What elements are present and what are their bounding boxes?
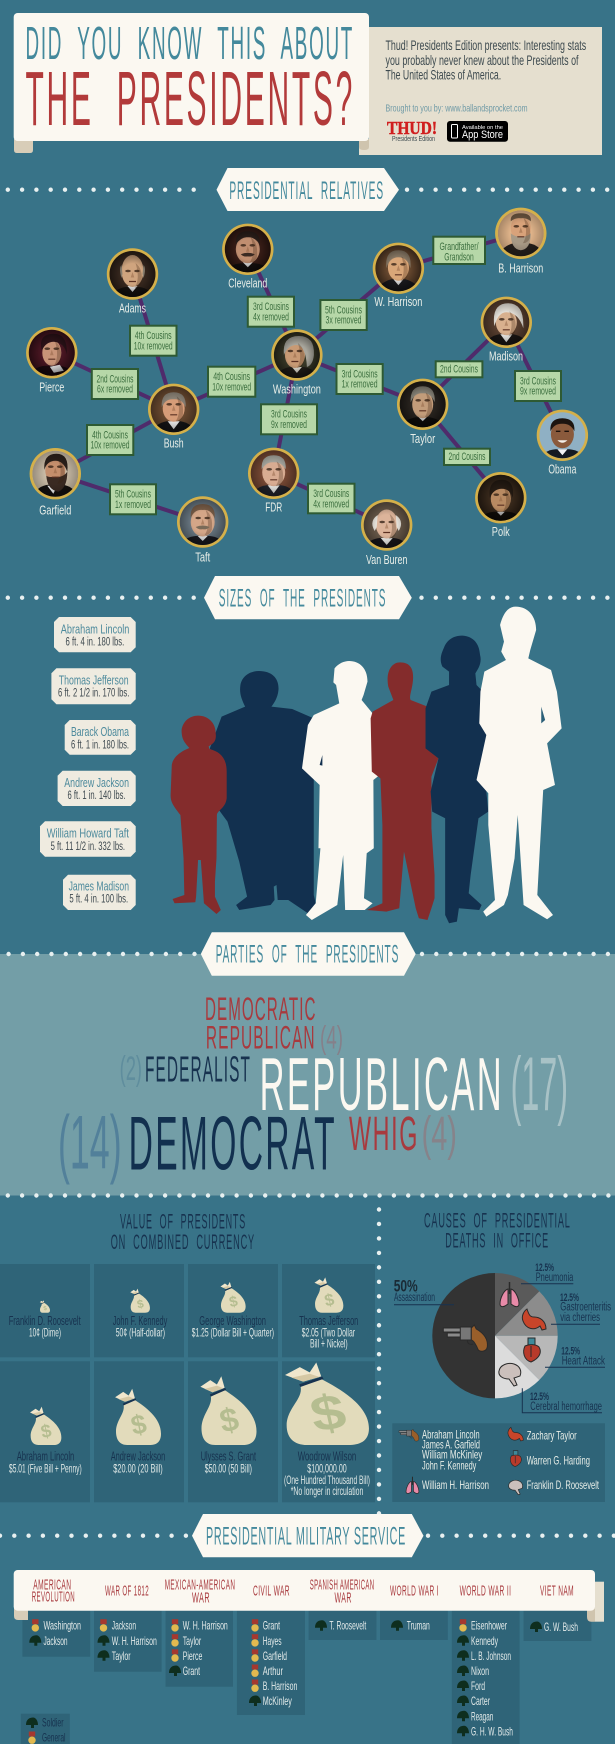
portrait: Madison	[481, 297, 532, 348]
tag: Lincoln: 6 ft. 4 in. 180 lbs.	[66, 637, 124, 649]
tag: Jefferson: 6 ft. 2 1/2 in. 170 lbs.	[58, 688, 129, 700]
tag: Madison: James Madison	[69, 879, 129, 894]
war banner: WAR OF 1812	[105, 1583, 149, 1600]
tag: Taft	[40, 821, 136, 857]
cell: Lincoln: $5.01 (Five Bill + Penny)	[9, 1461, 82, 1475]
cell: Jefferson: Bill + Nickel)	[310, 1336, 348, 1350]
relation labels: 6x removed	[97, 384, 133, 396]
relation labels: 9x removed	[520, 386, 556, 398]
column: Civil War: McKinley	[263, 1694, 292, 1708]
relation labels: 3rd Cousins	[520, 375, 556, 387]
heading ribbon: military	[192, 1514, 424, 1557]
cell: Jackson	[94, 1361, 184, 1502]
legend	[392, 1423, 605, 1502]
relation lines	[52, 233, 562, 525]
word: Democratic Republican: DEMOCRATIC	[205, 991, 316, 1027]
pie chart	[432, 1273, 558, 1398]
column: Mexican-American War: Taylor	[183, 1634, 201, 1648]
portrait: W. Harrison	[373, 243, 424, 294]
portrait: Pierce	[26, 327, 78, 378]
callout: gastroenteritis	[551, 1292, 611, 1324]
legend icon: heart	[510, 1451, 521, 1467]
column: World War II: Eisenhower	[471, 1619, 507, 1633]
relation labels: 4x removed	[253, 311, 289, 323]
portrait: B. Harrison	[495, 208, 546, 259]
portrait: FDR	[248, 448, 299, 499]
relation labels: 3rd Cousins	[271, 409, 307, 421]
legend icon: pistol	[399, 1429, 419, 1441]
panel: value on currency	[0, 1210, 375, 1502]
relation labels: 10x removed	[134, 340, 173, 352]
logo: Thud: Presidents Edition	[392, 134, 435, 143]
icon: pistol	[443, 1325, 487, 1351]
label: Adams	[119, 300, 146, 315]
cell: Grant: Ulysses S. Grant	[201, 1450, 256, 1464]
war banner	[14, 1570, 604, 1622]
war label: Spanish American War	[310, 1576, 374, 1606]
icon: heart	[524, 1338, 540, 1362]
legend text: assassinated: Abraham Lincoln	[422, 1427, 480, 1441]
tag: Taft: William Howard Taft	[47, 826, 129, 841]
cell: Roosevelt: $	[43, 1306, 48, 1312]
label: Taylor	[410, 431, 436, 446]
panel: header	[14, 13, 602, 155]
vertical divider	[377, 1210, 381, 1514]
title banner	[14, 13, 369, 153]
cell: Washington: $1.25 (Dollar Bill + Quarter)	[192, 1326, 274, 1340]
band	[0, 954, 615, 1196]
section: presidential relatives	[8, 168, 610, 567]
cell: Kennedy	[94, 1264, 184, 1357]
legend text: Taylor: Zachary Taylor	[527, 1428, 577, 1442]
column: Viet Nam: G. W. Bush	[544, 1620, 578, 1634]
section: military service	[0, 1514, 615, 1744]
cell: Wilson: $	[305, 1383, 351, 1442]
cell: Jefferson: Thomas Jefferson	[299, 1314, 358, 1328]
column: Civil War: Arthur	[263, 1664, 283, 1678]
tag: Madison: 5 ft. 4 in. 100 lbs.	[69, 894, 128, 906]
tag: Obama	[65, 720, 136, 755]
column: Mexican-American War	[166, 1608, 233, 1687]
section: parties of the presidents: DEMOCRAT	[129, 1101, 337, 1186]
legend text: Harrison: William H. Harrison	[422, 1478, 489, 1492]
panel: value on currency: VALUE OF PRESIDENTS	[120, 1210, 246, 1233]
label: Washington	[273, 381, 321, 396]
war label: Spanish American War: WAR	[334, 1589, 352, 1606]
tag: Jackson: Andrew Jackson	[64, 775, 129, 790]
tag: Jackson	[58, 771, 136, 806]
silhouette: Jackson	[367, 662, 438, 920]
badge: App Store: Available on the	[462, 125, 503, 131]
column: Civil War	[237, 1608, 305, 1715]
heading	[111, 1210, 255, 1254]
cell: Lincoln: $	[39, 1419, 53, 1442]
cell: Kennedy: $	[136, 1298, 145, 1311]
relation labels: 4th Cousins	[213, 371, 251, 383]
relation labels	[87, 237, 561, 514]
column: Mexican-American War: Grant	[183, 1664, 200, 1678]
section: parties of the presidents: FEDERALIST	[145, 1049, 251, 1090]
column: World War I: Truman	[407, 1619, 430, 1633]
relation labels: 1x removed	[342, 379, 378, 391]
relation labels: Grandson	[444, 252, 474, 264]
callout: assassination: 50%	[394, 1277, 418, 1296]
label: Van Buren	[366, 552, 407, 567]
tag: Obama: Barack Obama	[71, 724, 130, 739]
portrait: Bush	[148, 384, 199, 435]
section: sizes of the presidents	[8, 576, 610, 923]
word: Democratic Republican: (4)	[320, 1019, 343, 1055]
relation labels: Grandfather/	[440, 241, 479, 253]
heading ribbon: parties	[201, 932, 416, 976]
war banner: REVOLUTION	[32, 1589, 75, 1606]
war banner: WORLD WAR I	[390, 1583, 439, 1600]
label: Taft	[195, 550, 210, 565]
callout: heart attack	[545, 1346, 605, 1368]
war label: Mexican-American War	[165, 1576, 235, 1606]
callout: pneumonia: 12.5%	[535, 1262, 554, 1274]
column: Viet Nam	[524, 1608, 591, 1641]
column: World War II: Ford	[471, 1679, 485, 1693]
logo: Thud: THUD!	[387, 118, 437, 138]
cell: Wilson: Woodrow Wilson	[298, 1450, 356, 1464]
relation labels: 2nd Cousins	[440, 364, 478, 376]
legend text: assassinated: John F. Kennedy	[422, 1458, 476, 1472]
war banner: SPANISH AMERICAN	[310, 1576, 374, 1593]
label: Pierce	[39, 380, 64, 395]
column: Mexican-American War: W. H. Harrison	[183, 1619, 228, 1633]
relation labels: 5th Cousins	[325, 304, 362, 316]
label: B. Harrison	[498, 261, 543, 276]
column: American Revolution: Washington	[44, 1619, 81, 1633]
legend text: assassinated: James A. Garfield	[422, 1437, 480, 1451]
legend text: assassinated	[422, 1427, 482, 1472]
key: soldier and general: Soldier	[42, 1716, 64, 1730]
column: Civil War: Garfield	[263, 1649, 287, 1663]
cell: Washington	[188, 1264, 278, 1357]
word: Democratic Republican: REPUBLICAN	[206, 1019, 316, 1055]
label: Cleveland	[228, 276, 267, 291]
portrait: Cleveland	[222, 224, 274, 275]
legend icon: stomach	[508, 1427, 523, 1441]
cell: Lincoln	[0, 1361, 90, 1502]
text block: intro	[386, 37, 586, 82]
relation labels: 3rd Cousins	[253, 301, 289, 313]
callout: assassination	[394, 1277, 454, 1305]
badge: App Store	[447, 121, 508, 142]
heading	[424, 1210, 571, 1252]
relation labels: 1x removed	[115, 499, 151, 511]
silhouette: Jefferson	[426, 636, 488, 923]
word: Democrat: (14)	[58, 1100, 122, 1185]
callout: cerebral hemorrhage: 12.5%	[530, 1391, 549, 1403]
callout: pneumonia: Pneumonia	[536, 1272, 574, 1284]
portrait: Taylor	[397, 379, 448, 430]
column: Spanish American War: T. Roosevelt	[329, 1619, 367, 1633]
legend text: assassinated: William McKinley	[422, 1448, 482, 1462]
legend icon: lungs	[406, 1477, 419, 1493]
cell: Jackson: $20.00 (20 Bill)	[113, 1461, 163, 1475]
cell: Jefferson	[282, 1264, 375, 1357]
heading ribbon: sizes	[204, 576, 412, 619]
column: Civil War: Grant	[263, 1619, 280, 1633]
portrait: Taft	[177, 496, 228, 548]
relation labels: 3x removed	[326, 315, 362, 327]
word: Whig: (4)	[422, 1108, 457, 1161]
tag: Jefferson	[51, 668, 136, 704]
callout: assassination: Assassination	[394, 1292, 435, 1304]
panel: causes of death	[392, 1210, 611, 1502]
relation labels: 2nd Cousins	[96, 373, 134, 385]
label: Madison	[489, 349, 523, 364]
cell: Washington: George Washington	[199, 1314, 266, 1328]
relation labels: 10x removed	[90, 440, 130, 452]
portrait: Adams	[107, 248, 158, 300]
war banner: AMERICAN	[33, 1576, 71, 1593]
relation labels: 10x removed	[212, 381, 251, 393]
tag: Jefferson: Thomas Jefferson	[59, 672, 129, 687]
intro panel	[359, 27, 602, 155]
relation labels: 4th Cousins	[135, 330, 172, 342]
cell: Grant: $50.00 (50 Bill)	[205, 1461, 252, 1475]
label: FDR	[265, 500, 282, 515]
word: Federalist: (2)	[120, 1050, 142, 1088]
silhouette: Lincoln	[477, 607, 562, 919]
callout: pneumonia	[521, 1262, 574, 1284]
cell: Grant: $	[216, 1400, 242, 1440]
cell: Roosevelt: Franklin D. Roosevelt	[9, 1314, 81, 1328]
silhouette: Taft	[210, 671, 316, 913]
cell: Wilson: *No longer in circulation	[291, 1484, 363, 1498]
column: World War II: Nixon	[471, 1664, 489, 1678]
label: W. Harrison	[374, 294, 422, 309]
silhouette: Madison	[171, 716, 227, 914]
cell: Jefferson: $2.05 (Two Dollar	[302, 1326, 355, 1340]
callout: gastroenteritis: 12.5%	[560, 1292, 579, 1304]
column: War of 1812: Taylor	[112, 1649, 131, 1663]
tag: Taft: 5 ft. 11 1/2 in. 332 lbs.	[51, 841, 125, 853]
chart: silhouettes	[171, 607, 562, 923]
section: parties of the presidents	[0, 932, 615, 1196]
text block: intro: The United States of America.	[386, 66, 501, 82]
key: soldier and general	[21, 1714, 70, 1744]
callout: cerebral hemorrhage	[522, 1388, 602, 1413]
column: Civil War: B. Harrison	[263, 1679, 297, 1693]
cell: Roosevelt	[0, 1264, 90, 1357]
war label: Mexican-American War: WAR	[192, 1589, 210, 1606]
column: World War II: Kennedy	[471, 1634, 498, 1648]
column: World War I	[380, 1608, 448, 1640]
tag: Obama: 6 ft. 1 in. 180 lbs.	[71, 739, 129, 751]
cell: Wilson: (One Hundred Thousand Bill)	[284, 1473, 370, 1487]
credit: Brought to you by: www.ballandsprocket.com	[386, 103, 528, 115]
label: Obama	[548, 461, 577, 476]
callout: heart attack: 12.5%	[561, 1346, 580, 1358]
tag: Madison	[63, 875, 136, 910]
label: Garfield	[39, 502, 71, 517]
relation labels: 3rd Cousins	[342, 368, 378, 380]
cell: Kennedy: 50¢ (Half-dollar)	[116, 1326, 165, 1340]
war label: American Revolution	[32, 1576, 75, 1606]
badge: App Store: App Store	[462, 129, 503, 141]
column: World War II	[452, 1608, 520, 1744]
section: presidential relatives: PRESIDENTIAL RELATIVES	[229, 177, 384, 205]
column: Civil War: Hayes	[263, 1634, 282, 1648]
portrait: Washington	[271, 329, 323, 381]
word: Democrat	[58, 1100, 337, 1186]
column: American Revolution	[22, 1608, 90, 1657]
word: Whig: WHIG	[349, 1108, 419, 1161]
column: Spanish American War	[309, 1608, 376, 1640]
tag: Lincoln: Abraham Lincoln	[61, 621, 129, 636]
column: War of 1812	[94, 1608, 162, 1672]
word: Federalist	[120, 1049, 251, 1090]
portrait: Van Buren	[361, 499, 412, 551]
column: War of 1812: Jackson	[112, 1619, 136, 1633]
relation labels: 3rd Cousins	[313, 488, 350, 500]
silhouette: Obama	[302, 661, 380, 920]
relation labels: 2nd Cousins	[448, 451, 486, 463]
cell: Wilson: $100,000.00	[307, 1461, 347, 1475]
relation labels: 9x removed	[271, 419, 307, 431]
word: Democratic Republican	[205, 991, 343, 1055]
icon: stomach	[522, 1309, 546, 1330]
portrait: Garfield	[30, 448, 81, 499]
cell: Roosevelt: 10¢ (Dime)	[29, 1326, 61, 1340]
tag: Lincoln	[54, 617, 136, 652]
label: Bush	[164, 436, 184, 451]
legend icon: brain	[509, 1480, 523, 1495]
war banner: WORLD WAR II	[460, 1583, 511, 1600]
relation labels: 4th Cousins	[92, 429, 128, 441]
heading ribbon: relatives	[216, 168, 399, 211]
label: Polk	[492, 524, 510, 539]
cell: Washington: $	[228, 1294, 240, 1311]
war banner: MEXICAN-AMERICAN	[165, 1576, 235, 1593]
cell: Kennedy: John F. Kennedy	[113, 1314, 168, 1328]
icon: brain	[499, 1363, 521, 1386]
tag: Jackson: 6 ft. 1 in. 140 lbs.	[68, 790, 126, 802]
relation labels: 5th Cousins	[115, 489, 151, 501]
relation labels: 4x removed	[313, 498, 349, 510]
cell: Wilson	[282, 1361, 375, 1502]
portrait: Obama	[537, 410, 588, 461]
column: World War II: G. H. W. Bush	[471, 1724, 513, 1738]
icon: lungs	[500, 1282, 519, 1307]
war banner: CIVIL WAR	[253, 1583, 290, 1600]
cell: Grant	[188, 1361, 278, 1502]
column: Mexican-American War: Pierce	[183, 1649, 203, 1663]
cell: Jackson: $	[128, 1408, 149, 1441]
cell: Jefferson: $	[323, 1290, 336, 1310]
cell: Lincoln: Abraham Lincoln	[17, 1450, 74, 1464]
portrait: Polk	[475, 472, 526, 523]
column: World War II: Carter	[471, 1694, 490, 1708]
column: War of 1812: W. H. Harrison	[112, 1634, 157, 1648]
panel: value on currency: ON COMBINED CURRENCY	[111, 1231, 255, 1254]
cell: Jackson: Andrew Jackson	[111, 1450, 165, 1464]
column: World War II: Reagan	[471, 1709, 493, 1723]
column: American Revolution: Jackson	[44, 1634, 68, 1648]
column: World War II: L. B. Johnson	[471, 1649, 511, 1663]
